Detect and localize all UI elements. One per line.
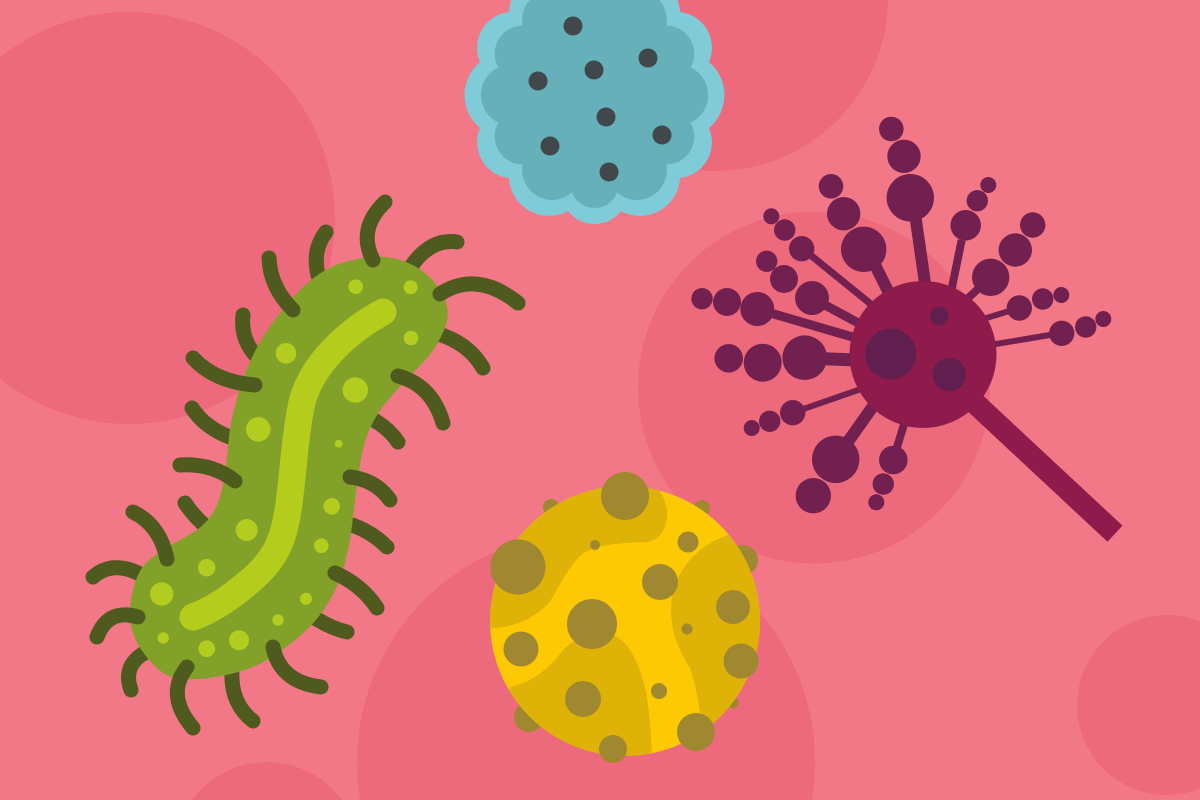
head xyxy=(850,281,996,428)
microbe: purple spiked virus xyxy=(691,117,1115,534)
body xyxy=(130,257,448,679)
bulbs xyxy=(691,117,1111,513)
spots behind sphere xyxy=(514,499,758,732)
hairs behind body xyxy=(93,232,483,721)
hairs over body xyxy=(97,202,518,728)
darker patches xyxy=(490,488,760,756)
stem xyxy=(962,391,1115,534)
outer scalloped membrane xyxy=(465,0,724,224)
microbe: green bacterium xyxy=(93,202,518,728)
sphere xyxy=(490,486,760,756)
dark spots xyxy=(528,16,672,182)
inner scalloped body xyxy=(481,0,708,208)
head spots xyxy=(865,307,966,391)
microbe: blue scalloped cell xyxy=(465,0,724,224)
central stripe xyxy=(193,312,383,617)
stalks xyxy=(757,200,1062,460)
microbe: yellow spore xyxy=(480,470,770,763)
light spots xyxy=(150,279,418,657)
brown spots xyxy=(490,472,758,763)
